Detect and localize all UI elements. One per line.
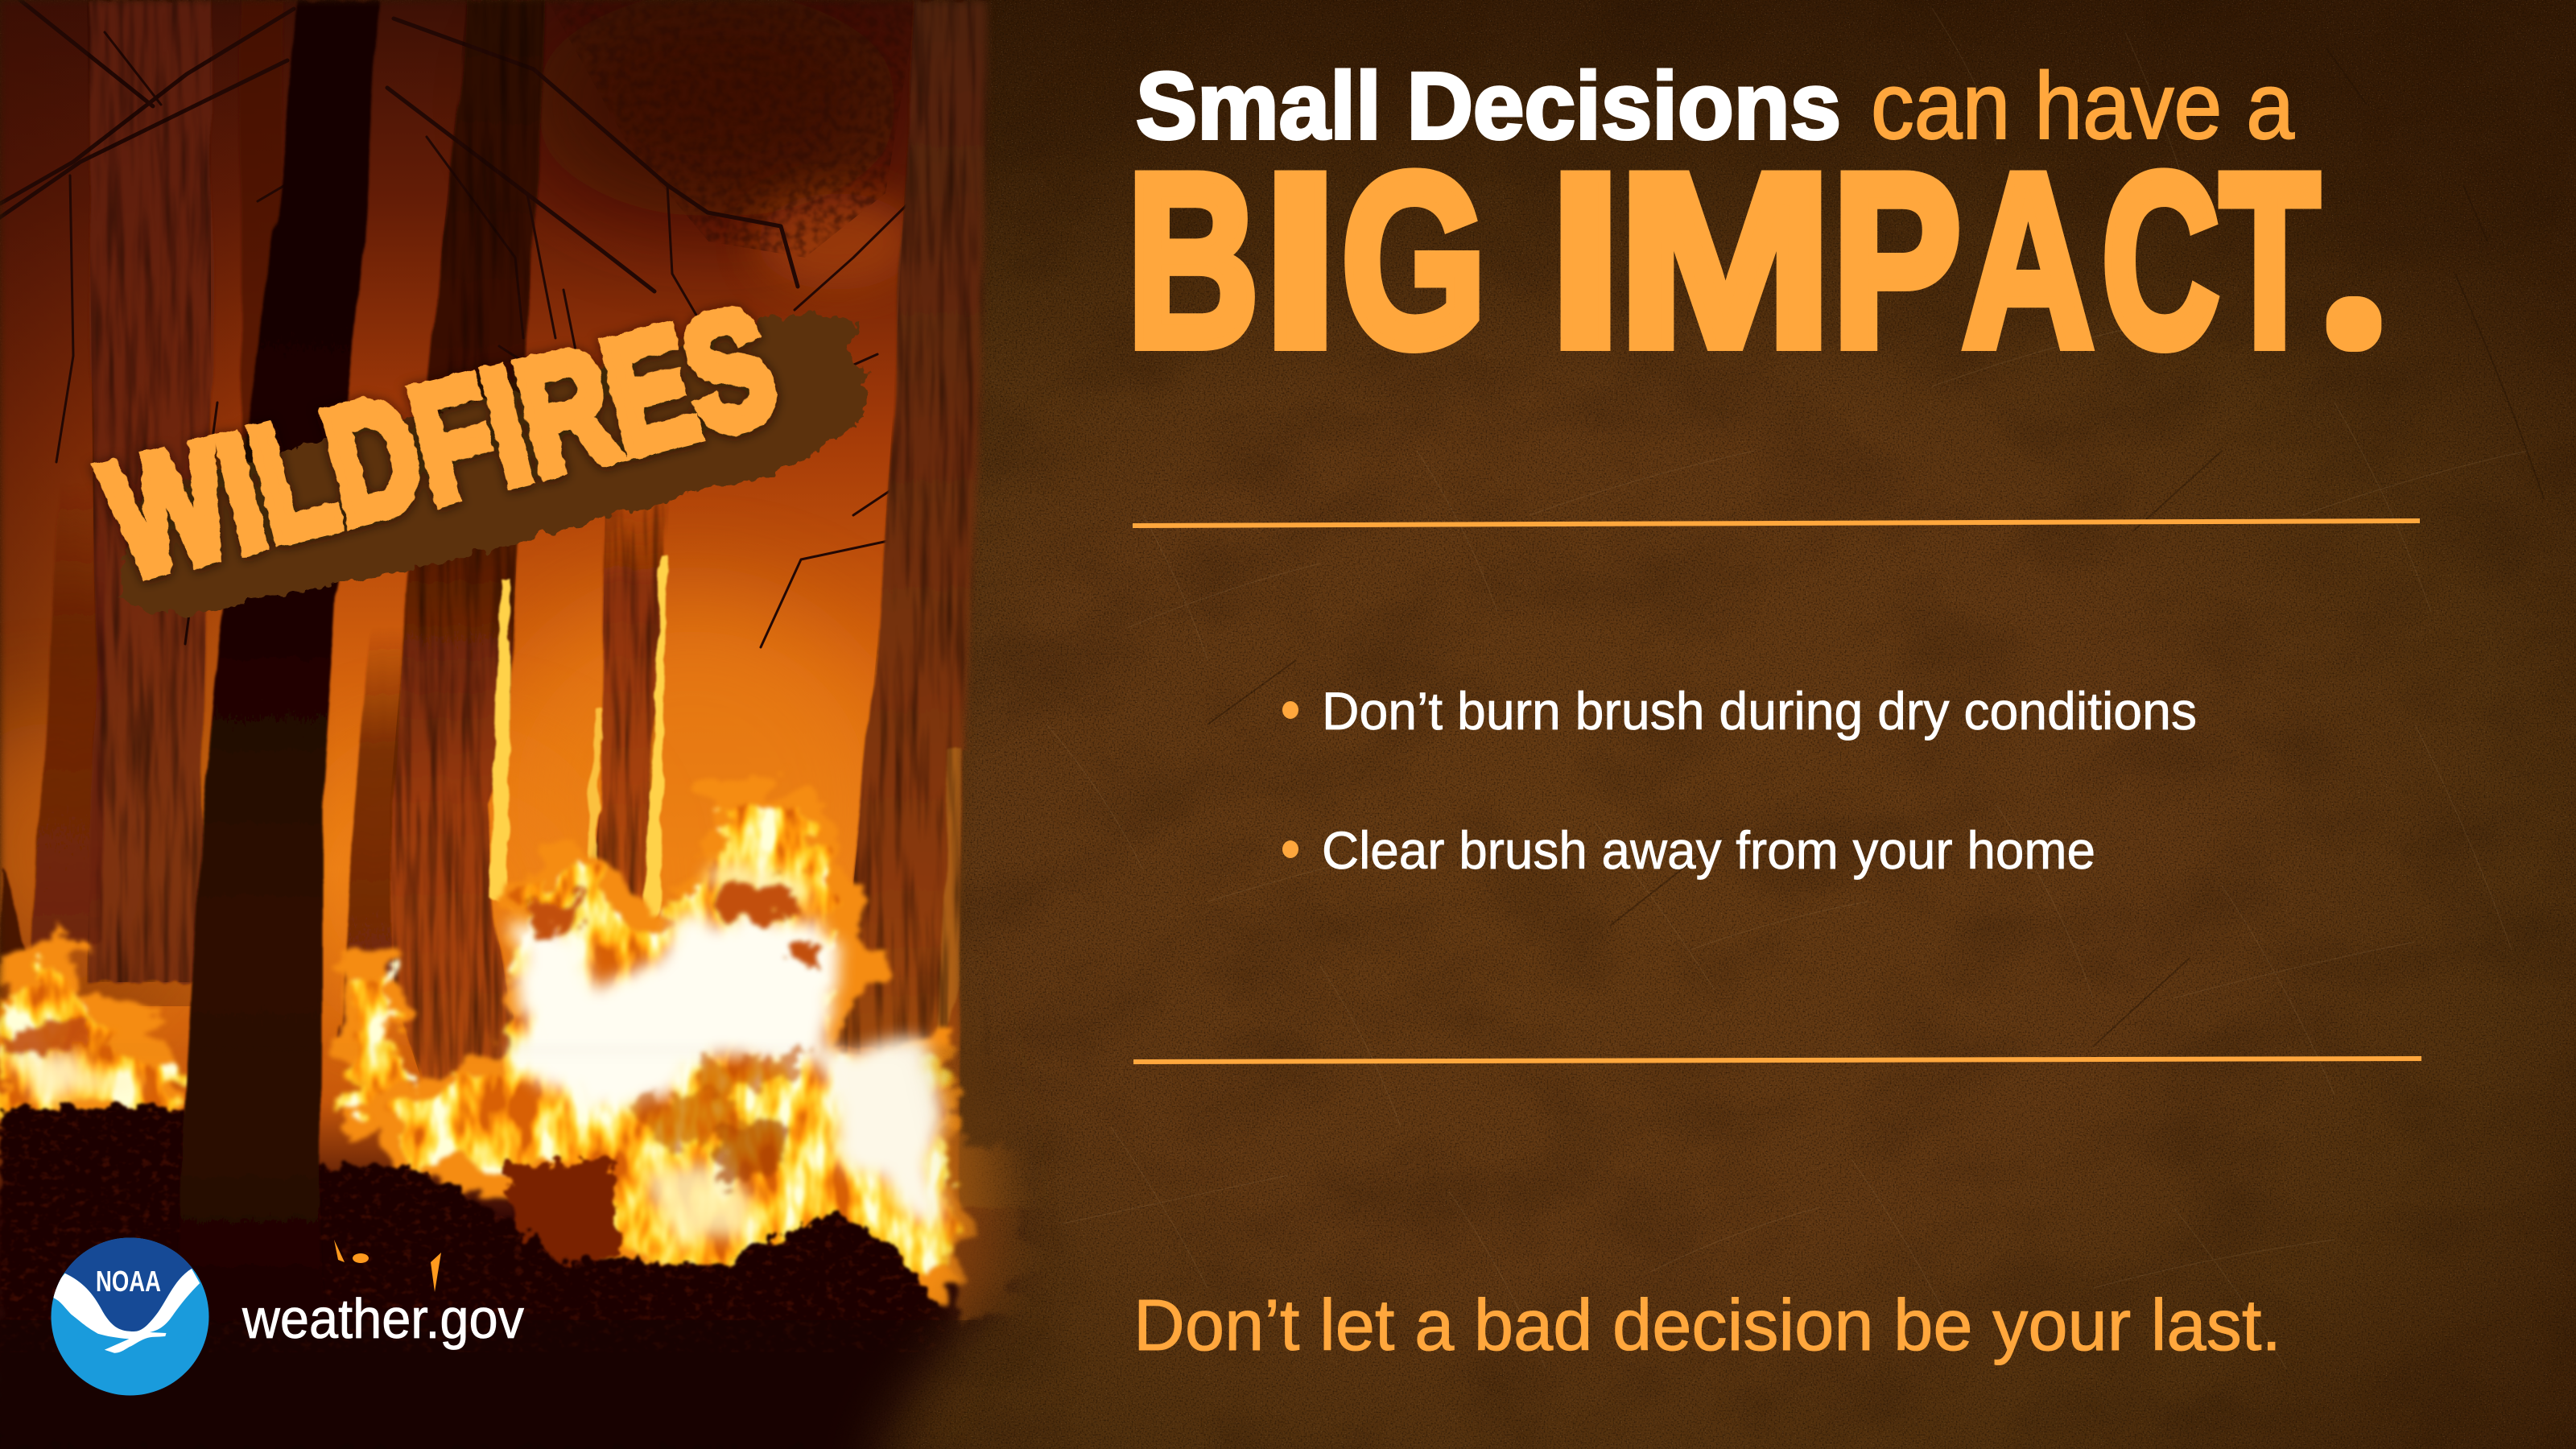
tree trunk: burning centre: [583, 499, 670, 970]
dark forest floor: [0, 1108, 1046, 1449]
flames: white hot core: [16, 853, 938, 1240]
wildfires badge: [89, 271, 874, 614]
burning bush: [506, 1159, 620, 1264]
tips list: [1282, 681, 2197, 880]
tree trunk: centre left: [390, 0, 544, 1119]
bullet 2: [1282, 840, 1298, 858]
heading: BIG IMPACT: M: [1618, 122, 1832, 398]
logo: NOAA: NOAA: [96, 1265, 161, 1298]
sparks on floor: [334, 1240, 441, 1292]
heading: BIG IMPACT: C: [2102, 122, 2219, 398]
flames: distant right embers: [926, 1119, 1030, 1320]
glowing trunk edges: [491, 555, 667, 950]
heading: BIG IMPACT: G: [1341, 122, 1487, 398]
heading: BIG IMPACT: A: [1963, 122, 2094, 398]
heading: BIG IMPACT: B: [1127, 122, 1259, 398]
website: weather.gov: weather.gov: [242, 1287, 524, 1350]
tip 1: Don’t burn brush during dry conditions: [1322, 681, 2197, 741]
heading line: small decisions: can have a: [1871, 53, 2294, 159]
burning debris patches: [0, 881, 823, 1183]
smoky orange sky: [0, 0, 1015, 1449]
brush stroke: [117, 314, 874, 614]
bullet 1: [1282, 701, 1298, 719]
tip 2: Clear brush away from your home: [1322, 820, 2095, 880]
closing message: Don’t let a bad decision be your last.: [1133, 1286, 2281, 1366]
wildfires label: WILDFIRES: [89, 271, 791, 614]
branches: [0, 0, 908, 647]
tree trunk: main dark foreground: [177, 0, 377, 1320]
foliage: upper canopy: [565, 3, 913, 258]
bark grain overlay on trunks: [0, 0, 1046, 1127]
heading: BIG IMPACT: P: [1832, 122, 1961, 398]
top divider: [1133, 521, 2420, 526]
tree trunk: right foreground: [819, 0, 1063, 1208]
photo: forest fire: [0, 0, 1025, 1449]
logo: NOAA: [48, 1232, 211, 1396]
flames: orange base: [0, 781, 962, 1296]
heading: BIG IMPACT: .: [2347, 284, 2360, 338]
heading: BIG IMPACT: I: [1262, 122, 1339, 398]
heading: BIG IMPACT: I: [1549, 122, 1622, 398]
heading: BIG IMPACT: T: [2220, 122, 2319, 398]
bottom divider: [1133, 1059, 2421, 1062]
flames: streaked yellow layer: [0, 813, 954, 1280]
distant tree trunks: [0, 0, 402, 1038]
heading line: small decisions: Small Decisions: [1136, 53, 1841, 159]
